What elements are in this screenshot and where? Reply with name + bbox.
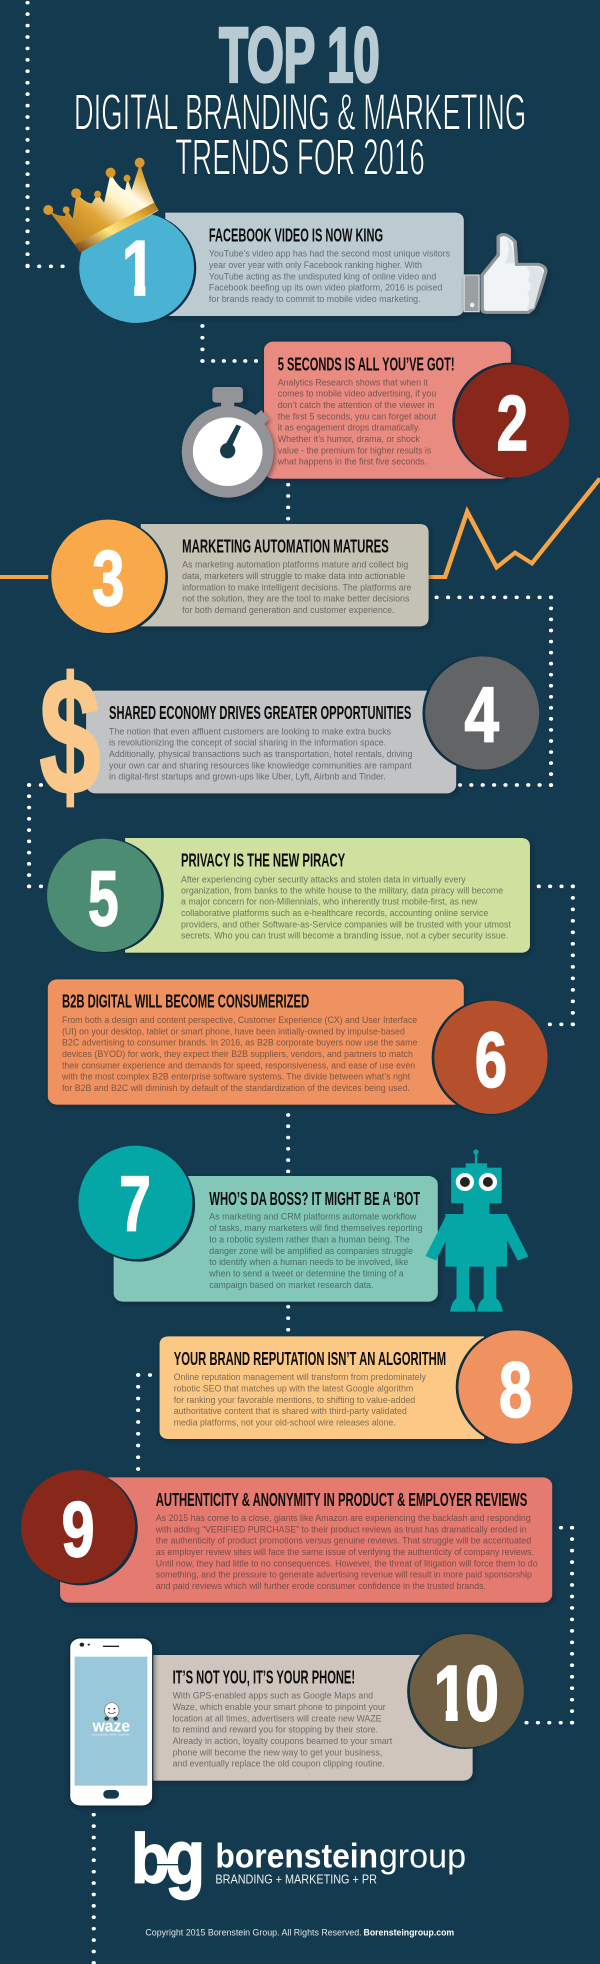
panel 9: authenticity — [21, 1470, 552, 1603]
body text 8: authoritative content that is shared with third-party validated — [174, 1407, 407, 1417]
number badge 5 — [47, 838, 164, 953]
body text 1: YouTube’s video app has had the second most unique visitors — [209, 249, 450, 259]
body text 10: location at all times, advertisers will create new WAZE — [173, 1714, 382, 1724]
number badge 2 — [452, 363, 569, 478]
number badge 10 — [407, 1634, 524, 1749]
body text 9 — [155, 1514, 538, 1592]
body text 5: collaborative platforms such as e-healthcare records, accounting online service — [181, 909, 489, 919]
body text 7: As marketing and CRM platforms automate workflow — [209, 1212, 417, 1222]
body text 1: Facebook beefing up its own video platform, 2016 is poised — [209, 283, 442, 293]
number badge 1 — [79, 212, 196, 324]
heading 3: MARKETING AUTOMATION MATURES — [182, 537, 389, 557]
number badge 2: 2 — [497, 379, 528, 467]
icon: stopwatch — [182, 387, 274, 498]
panel 7: who's da boss — [78, 1146, 528, 1312]
logo: borensteingroup — [131, 1816, 466, 1900]
body text 4: in digital-first startups and grown-ups like Uber, Lyft, Airbnb and Tinder. — [109, 772, 386, 782]
body text 2: it as engagement drops dramatically. — [278, 423, 420, 433]
body text 4: The notion that even affluent customers are looking to make extra bucks — [109, 727, 391, 737]
panel 5: privacy — [47, 838, 530, 953]
icon: robot — [426, 1149, 528, 1312]
body text 6 — [61, 1016, 418, 1094]
icon: waze logo: outsmarting traffic, together — [92, 1733, 131, 1736]
body text 4: your own car and sharing resources like knowledge communities are rampant — [109, 761, 412, 771]
body text 2: Whether it’s humor, drama, or shock — [278, 435, 421, 445]
body text 3: information to make intelligent decisions. The platforms are — [182, 583, 412, 593]
number badge 3: 3 — [92, 534, 124, 622]
number badge 8 — [456, 1329, 572, 1445]
body text 7: when to send a tweet or determine the timing of a — [208, 1269, 404, 1279]
icon: crown — [43, 158, 158, 253]
body text 3: not the solution, they are the tool to make better decisions — [182, 594, 409, 604]
body text 6: From both a design and content perspective, Customer Experience (CX) and User Interface — [62, 1016, 417, 1026]
body text 10: and eventually replace the old coupon clipping routine. — [173, 1759, 385, 1769]
body text 5 — [181, 875, 511, 941]
heading 6: B2B DIGITAL WILL BECOME CONSUMERIZED — [62, 992, 309, 1012]
body text 10: With GPS-enabled apps such as Google Maps and — [173, 1691, 373, 1701]
number badge 5: 5 — [88, 854, 119, 942]
copyright line: Copyright 2015 Borenstein Group. All Rights Reserved. — [145, 1928, 362, 1938]
number badge 6 — [432, 1000, 548, 1115]
body text 2: don’t catch the attention of the viewer in — [278, 401, 434, 411]
number badge 7 — [78, 1146, 195, 1262]
body text 9: As 2015 has come to a close, giants like Amazon are experiencing the backlash and responding — [156, 1514, 531, 1524]
icon: orange trend line — [0, 478, 600, 577]
body text 6: their consumer experience and demands for speed, responsiveness, and ease of use even — [62, 1061, 415, 1071]
panel 4: shared economy — [39, 644, 539, 830]
body text 6: with the most complex B2B enterprise software systems. The divide between what’s right — [61, 1072, 410, 1082]
number badge 4: 4 — [465, 671, 499, 758]
body text 8: for ranking your favorable mentions, to shifting to value-added — [174, 1396, 415, 1406]
body text 5: providers, and other Software-as-Service companies will be trusted with your utmost — [181, 920, 511, 930]
body text 9: and paid reviews which will further erode consumer confidence in the trusted brands. — [156, 1582, 486, 1592]
body text 3 — [182, 560, 412, 616]
body text 2: value - the premium for higher results is — [278, 446, 431, 456]
logo: borensteingroup: g — [165, 1816, 205, 1900]
body text 4: is revolutionizing the concept of social sharing in the information space. — [109, 738, 386, 748]
body text 8: Online reputation management will transform from predominately — [174, 1373, 426, 1383]
panel 8: brand reputation — [160, 1329, 572, 1445]
number badge 9: 9 — [62, 1485, 95, 1573]
number badge 10: 10 — [434, 1649, 499, 1737]
body text 5: After experiencing cyber security attacks and stolen data in virtually every — [181, 875, 466, 885]
body text 5: organization, from banks to the white house to the military, data piracy will become — [181, 886, 504, 896]
body text 1: YouTube acting as the undisputed king of online video and — [209, 272, 436, 282]
body text 6: (UI) on your desktop, tablet or smart phone, have been initially-owned by impulse-based — [62, 1027, 405, 1037]
number badge 8: 8 — [499, 1346, 532, 1433]
body text 2: Analytics Research shows that when it — [278, 378, 428, 388]
body text 3: for both demand generation and customer experience. — [182, 606, 395, 616]
body text 7: to identify when a human needs to be involved, like — [209, 1258, 409, 1268]
icon: smartphone — [70, 1638, 153, 1806]
body text 1 — [209, 249, 450, 305]
body text 9: the authenticity of product promotions versus genuine reviews. That struggle will be accentuated — [156, 1536, 531, 1546]
body text 4: Additionally, physical transactions such as transportation, hotel rentals, driving — [109, 750, 412, 760]
body text 1: for brands ready to commit to mobile video marketing. — [209, 295, 421, 305]
logo: borensteingroup: group — [379, 1837, 466, 1875]
body text 1: year over year with only Facebook ranking higher. With — [209, 261, 422, 271]
title — [74, 12, 526, 186]
body text 9: with adding “VERIFIED PURCHASE” to their product reviews as trust has dramatically eroded in — [155, 1525, 527, 1535]
body text 5: a major concern for non-Millennials, who inherently trust mobile-first, as new — [181, 897, 478, 907]
body text 7: of tasks, many marketers will find themselves reporting — [209, 1224, 422, 1234]
body text 7: campaign based on market research data. — [209, 1281, 373, 1291]
number badge 1: 1 — [122, 224, 155, 312]
number badge 7: 7 — [119, 1160, 151, 1247]
body text 6: for B2B and B2C will diminish by default of the standardization of the devices being used. — [62, 1084, 410, 1094]
logo: borensteingroup: BRANDING + MARKETING + PR — [215, 1871, 377, 1886]
body text 4 — [109, 727, 412, 782]
number badge 6: 6 — [475, 1016, 507, 1103]
number badge 4 — [422, 656, 539, 771]
body text 2 — [277, 378, 436, 467]
heading 10: IT’S NOT YOU, IT’S YOUR PHONE! — [173, 1668, 355, 1688]
heading 7: WHO’S DA BOSS? IT MIGHT BE A ‘BOT — [209, 1189, 421, 1210]
title: TOP 10 — [219, 12, 380, 98]
copyright line: Borensteingroup.com — [364, 1928, 454, 1938]
icon: waze logo: waze — [92, 1716, 130, 1735]
panel 6: B2B digital — [48, 979, 548, 1115]
body text 5: secrets. Who you can trust will become a branding issue, not a cyber security issue. — [181, 931, 508, 941]
panel 1: Facebook video — [43, 158, 546, 324]
body text 10: Already in action, loyalty coupons beamed to your smart — [173, 1737, 392, 1747]
body text 7: to a robotic system rather than a human being. The — [209, 1235, 410, 1245]
icon: dollar sign: $ — [39, 644, 101, 830]
body text 8: media platforms, not your old-school wire releases alone. — [174, 1418, 396, 1428]
body text 7 — [208, 1212, 422, 1291]
body text 6: B2C advertising to consumer brands. In 2016, as B2B corporate buyers now use the same — [62, 1038, 418, 1048]
body text 2: what happens in the first five seconds. — [277, 457, 427, 467]
panel 10: your phone — [70, 1634, 524, 1806]
body text 2: comes to mobile video advertising, if you — [278, 389, 436, 399]
icon: thumbs up — [464, 235, 546, 312]
body text 7: danger zone will be amplified as companies struggle — [209, 1247, 413, 1257]
body text 3: data, marketers will struggle to make data into actionable — [182, 572, 406, 582]
body text 10 — [173, 1691, 392, 1769]
panel 3: marketing automation — [0, 478, 600, 635]
panel 2: 5 seconds — [182, 342, 569, 498]
number badge 3 — [51, 519, 168, 635]
body text 2: the first 5 seconds, you can forget about — [278, 412, 436, 422]
body text 8: robotic SEO that matches up with the latest Google algorithm — [174, 1384, 413, 1394]
body text 10: phone will become the new way to get your business, — [173, 1748, 382, 1758]
body text 6: devices (BYOD) for work, they expect their B2B suppliers, vendors, and partners to match — [62, 1050, 413, 1060]
body text 10: to remind and reward you for stopping by their store. — [173, 1725, 378, 1735]
body text 3: As marketing automation platforms mature and collect big — [182, 560, 408, 570]
body text 10: Waze, which enable your smart phone to pinpoint your — [173, 1703, 386, 1713]
heading 5: PRIVACY IS THE NEW PIRACY — [181, 851, 345, 871]
heading 1: FACEBOOK VIDEO IS NOW KING — [209, 226, 383, 246]
icon: waze logo — [92, 1703, 131, 1736]
logo: borensteingroup: b — [131, 1819, 170, 1897]
logo: borensteingroup: borenstein — [215, 1837, 378, 1875]
body text 8 — [174, 1373, 426, 1428]
number badge 9 — [21, 1470, 138, 1585]
